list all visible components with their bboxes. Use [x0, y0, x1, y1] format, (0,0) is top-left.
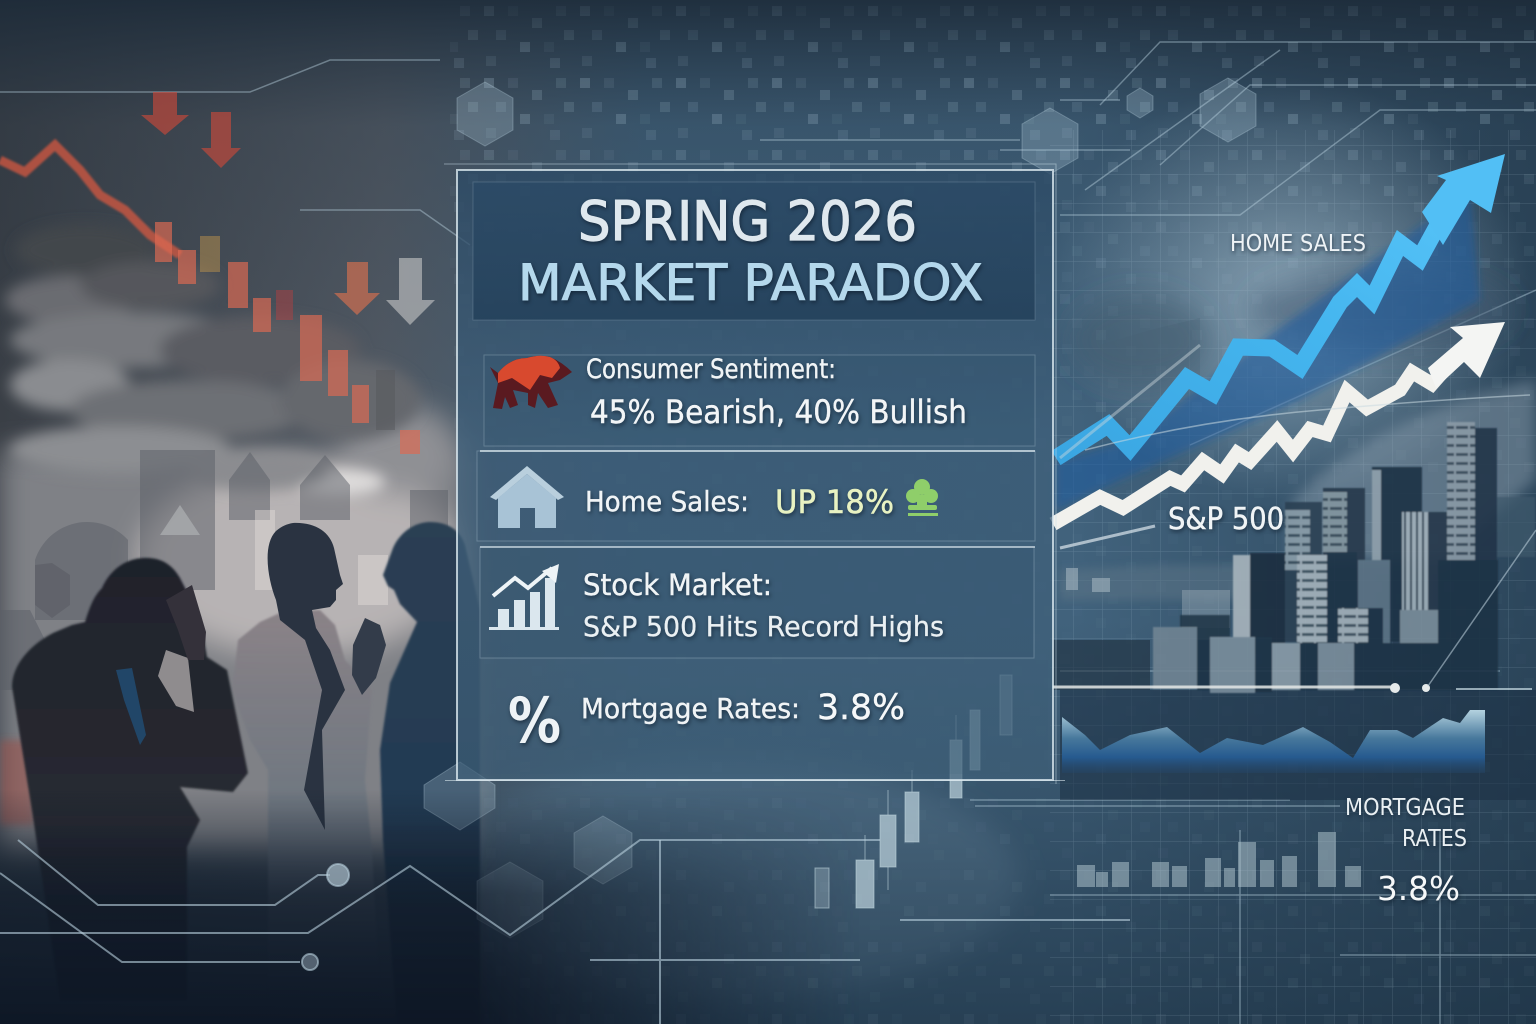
- row: home sales: Home Sales:: [585, 485, 749, 518]
- label: home sales: HOME SALES: [1230, 231, 1366, 257]
- row: consumer sentiment: 45% Bearish, 40% Bullish: [590, 393, 967, 431]
- row: home sales: [477, 451, 1035, 541]
- title block: MARKET PARADOX: [518, 254, 983, 312]
- people silhouettes: [12, 522, 480, 1024]
- lower circuit traces: [0, 840, 1130, 1024]
- row: consumer sentiment: [484, 354, 1035, 446]
- row: mortgage rates: Mortgage Rates:: [581, 692, 800, 725]
- tower group: [1153, 422, 1535, 693]
- label: mortgage rates: 3.8%: [1377, 869, 1460, 908]
- row: mortgage rates: [462, 660, 1048, 774]
- panel: market paradox card: [444, 164, 1065, 784]
- candlesticks: [815, 675, 1012, 908]
- label: mortgage rates: MORTGAGE: [1345, 795, 1465, 821]
- row: stock market: S&P 500 Hits Record Highs: [583, 610, 944, 643]
- icon: rising bar chart: [489, 564, 559, 630]
- figure: man in profile: [380, 522, 480, 1024]
- storm clouds: [0, 224, 470, 850]
- chart: blue area: [1062, 710, 1485, 773]
- title block: SPRING 2026: [578, 190, 917, 253]
- chart: S&P 500 white arrow: [1053, 322, 1530, 548]
- icon: house: [490, 466, 564, 528]
- figure: stressed man: [12, 558, 248, 1000]
- dim city outline left: [0, 450, 448, 690]
- row: home sales: UP 18%: [775, 483, 894, 521]
- dark ground fade: [0, 800, 806, 1024]
- row: stock market: Stock Market:: [583, 568, 772, 602]
- faint red glow: [0, 740, 34, 825]
- label: mortgage rates: RATES: [1402, 826, 1467, 852]
- hexagons: [424, 78, 1256, 938]
- title block: [473, 182, 1035, 320]
- figure: man in light jacket: [232, 523, 386, 1000]
- label: mortgage rates: [1345, 795, 1467, 908]
- icon: percent: %: [508, 684, 561, 757]
- icon: red bull: [490, 356, 572, 409]
- falling red market chart: [0, 92, 435, 454]
- row: stock market: [480, 547, 1035, 658]
- chart: home sales blue arrow: [1056, 154, 1505, 510]
- row: consumer sentiment: Consumer Sentiment:: [586, 354, 836, 385]
- icon: green up marker: [906, 479, 938, 516]
- trend marker line: [1052, 530, 1536, 693]
- label: S&P 500: S&P 500: [1168, 502, 1284, 537]
- chart: mortgage rate bars: [1077, 832, 1361, 887]
- skyline: [1052, 270, 1536, 800]
- row: mortgage rates: 3.8%: [817, 688, 905, 728]
